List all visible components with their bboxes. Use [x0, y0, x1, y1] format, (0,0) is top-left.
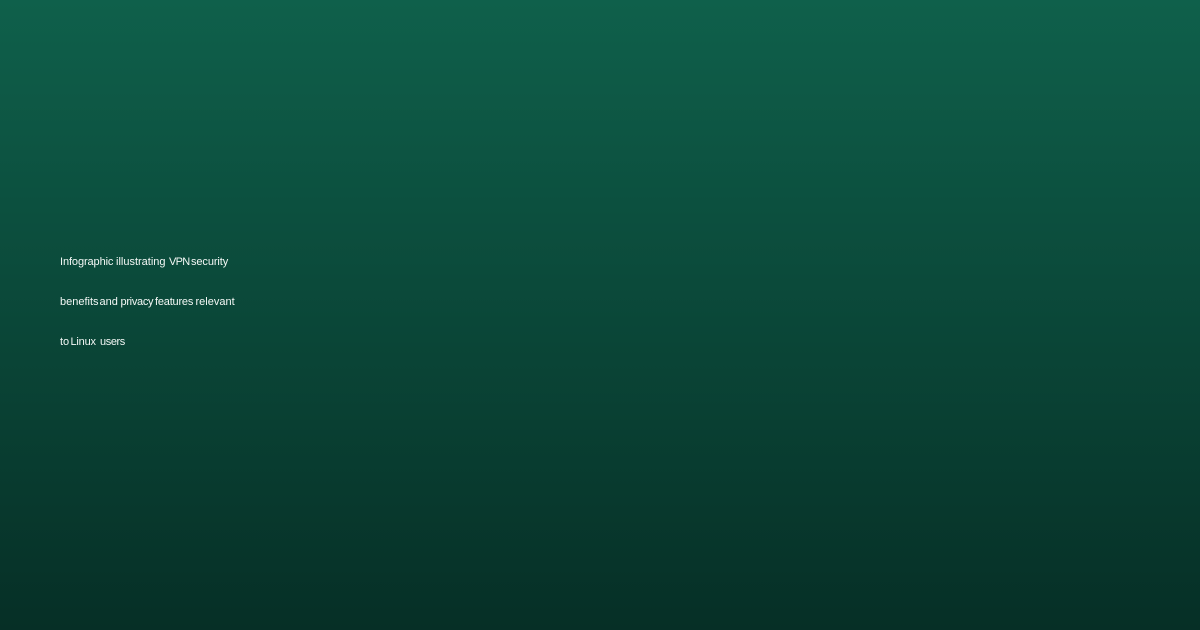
caption text block: to: [60, 336, 69, 348]
caption text block: users: [100, 336, 125, 348]
caption text block: and: [100, 296, 118, 308]
caption text block: security: [191, 256, 228, 268]
caption text block: [60, 256, 235, 348]
caption text block: benefits: [60, 296, 99, 308]
caption text block: VPN: [169, 256, 190, 268]
caption text block: illustrating: [116, 256, 166, 268]
caption text block: Linux: [70, 336, 96, 348]
caption text block: features: [155, 296, 193, 308]
caption text block: relevant: [196, 296, 235, 308]
caption text block: Infographic: [60, 256, 113, 268]
caption text block: privacy: [120, 296, 153, 308]
